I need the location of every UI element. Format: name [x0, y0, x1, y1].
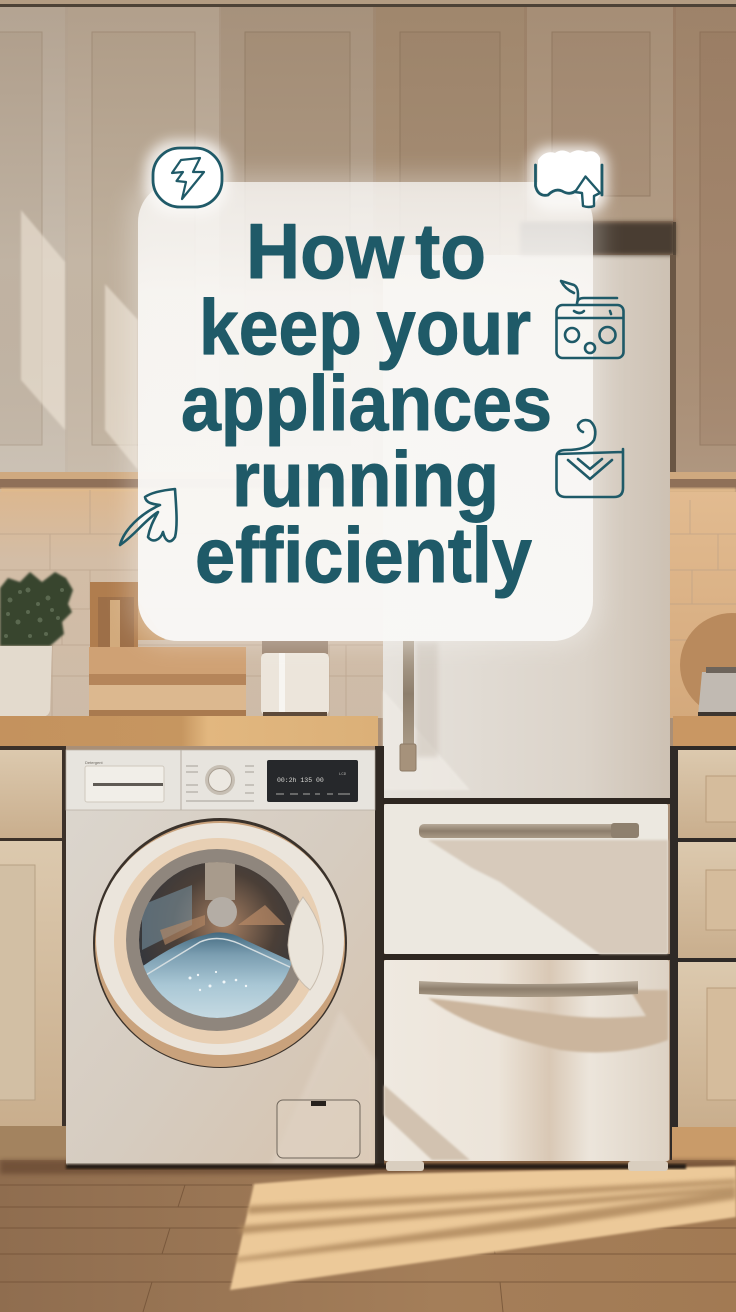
detergent drawer [85, 760, 164, 802]
door [93, 818, 347, 1068]
icon: washer with sprout [556, 281, 624, 358]
counter left [0, 716, 378, 746]
fridge door handle [400, 640, 416, 771]
sunlight patches on cabinets [21, 210, 138, 470]
counter right [673, 716, 736, 746]
base cabinets right [670, 746, 736, 1161]
fridge body [383, 222, 676, 798]
plant [0, 572, 73, 717]
drawer handle bottom [419, 981, 638, 997]
wall cabinets [0, 0, 736, 500]
title: appliances [181, 359, 552, 447]
digital display: 00:2h 135 00 [277, 777, 324, 784]
icon: cabinet with up arrow [536, 150, 602, 207]
digital display [267, 760, 358, 802]
base cabinets left [0, 746, 66, 1162]
door handle [288, 897, 323, 990]
icon: tray with hook [556, 420, 623, 497]
title: How to [246, 207, 486, 295]
washing machine [66, 746, 686, 1169]
drawer shadows [384, 840, 668, 1160]
cabinet valance [0, 472, 736, 493]
floor [0, 1160, 736, 1312]
detergent drawer: Detergent [85, 760, 103, 765]
tile backsplash [0, 490, 736, 718]
dial [205, 765, 235, 795]
glass and drum [139, 860, 300, 1020]
filter hatch [277, 1100, 360, 1158]
frosted title panel [138, 182, 593, 641]
sunlight on floor [230, 1166, 736, 1290]
title: keep your [199, 283, 531, 371]
title [181, 207, 552, 599]
title: running [232, 435, 499, 523]
soft glow around panel and icons [130, 140, 608, 645]
fridge feet [386, 1161, 668, 1171]
fridge drawers [383, 798, 670, 1171]
icon: lightning bolt [153, 148, 222, 207]
wooden board and pot right [680, 613, 736, 717]
wooden box [89, 582, 246, 716]
icon: curved arrow [120, 489, 177, 545]
jar [261, 641, 329, 716]
digital display: LCD [339, 773, 347, 777]
drawer handle top [419, 823, 639, 838]
countertop and jars [0, 572, 736, 746]
control panel [66, 750, 375, 810]
title: efficiently [195, 511, 532, 599]
